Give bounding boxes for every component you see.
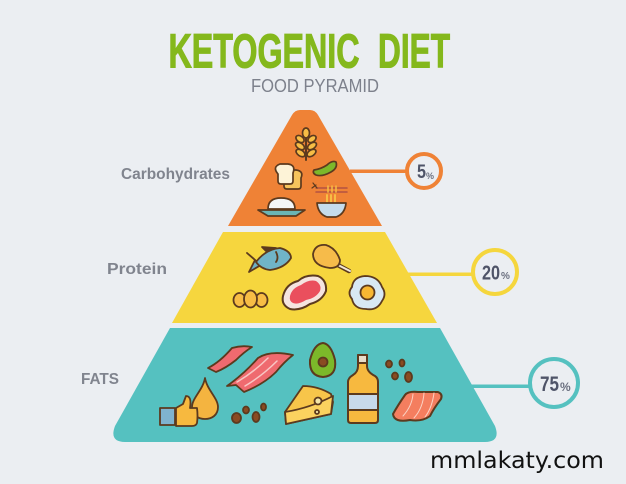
badge: 5 percent: % bbox=[426, 171, 434, 181]
icon: pickle bbox=[313, 161, 336, 176]
icon: fried egg bbox=[350, 276, 384, 309]
icon: bread bbox=[275, 164, 302, 189]
watermark: mmlakaty.com bbox=[430, 448, 604, 474]
icon: steak bbox=[283, 276, 326, 309]
pyramid tier: carbohydrates bbox=[228, 110, 382, 226]
title: KETOGENIC bbox=[168, 26, 360, 78]
title: DIET bbox=[378, 26, 450, 78]
icons: fat foods bbox=[160, 343, 442, 426]
connector: protein bbox=[408, 272, 474, 276]
pyramid tier: protein bbox=[172, 232, 437, 323]
icon: large bacon bbox=[227, 353, 293, 392]
subtitle: FOOD PYRAMID bbox=[251, 75, 379, 96]
icon: oil bottle bbox=[348, 355, 378, 423]
badge: 20 percent bbox=[473, 250, 517, 294]
icon: wheat bbox=[294, 128, 318, 160]
icon: fish bbox=[247, 247, 291, 272]
icon: chopsticks with noodles bbox=[312, 183, 347, 192]
badge: 20 percent: 20 bbox=[482, 262, 500, 284]
connector: carbohydrates bbox=[350, 170, 406, 173]
icon: coffee beans right bbox=[386, 360, 412, 382]
badge: 75 percent: % bbox=[560, 380, 571, 394]
icon: eggs bbox=[234, 290, 268, 308]
icon: oil drop bbox=[192, 378, 218, 419]
icon: thumbs up bbox=[160, 396, 198, 426]
badge: 5 percent: 5 bbox=[417, 162, 426, 183]
icons: carbohydrate foods bbox=[258, 128, 347, 217]
icon: small bacon bbox=[208, 346, 252, 372]
icon: noodle bowl bbox=[317, 195, 346, 217]
badge: 75 percent: 75 bbox=[540, 373, 559, 396]
badge: 20 percent: % bbox=[501, 271, 510, 282]
connector: fats bbox=[470, 384, 530, 388]
icon: avocado bbox=[310, 343, 335, 377]
label: fats: FATS bbox=[81, 371, 119, 388]
icon: chicken leg bbox=[313, 245, 350, 271]
icons: protein foods bbox=[234, 245, 384, 309]
icon: cheese bbox=[285, 386, 333, 424]
badge: 75 percent bbox=[530, 359, 578, 407]
label: protein: Protein bbox=[107, 261, 167, 278]
icon: rice plate bbox=[258, 198, 305, 216]
pyramid tier: fats bbox=[113, 328, 497, 442]
badge: 5 percent bbox=[407, 154, 441, 188]
icon: salmon bbox=[393, 392, 442, 421]
label: carbohydrates: Carbohydrates bbox=[121, 166, 230, 183]
icon: coffee beans left bbox=[232, 404, 266, 423]
